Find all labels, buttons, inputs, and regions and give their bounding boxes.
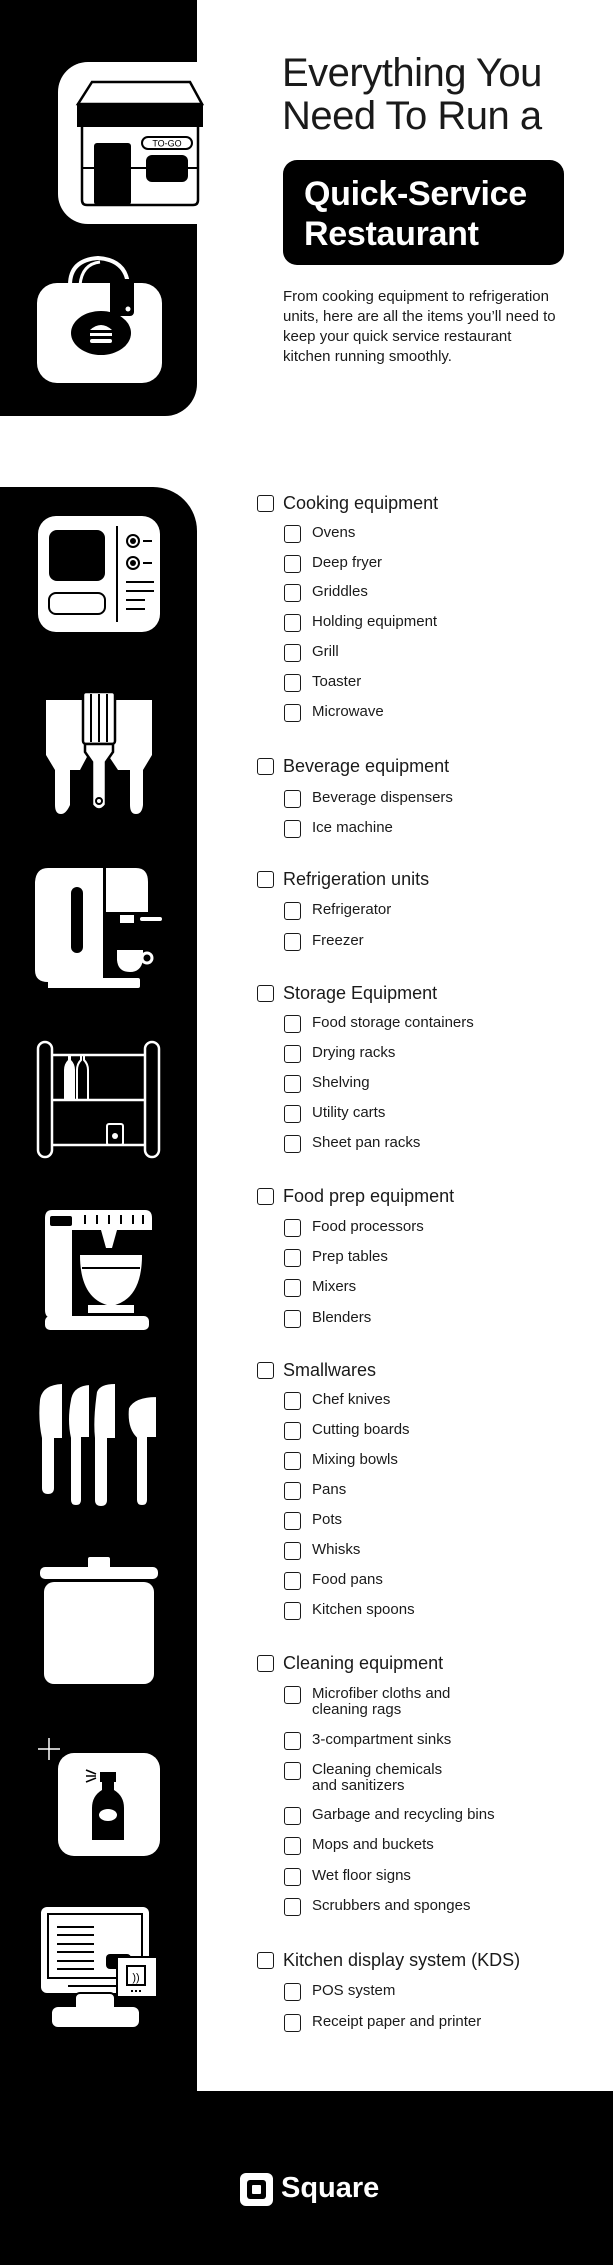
section: cleaning equipment: and sanitizers — [312, 1777, 405, 1794]
icon: knives — [39, 1384, 156, 1506]
title: Everything You — [282, 51, 542, 95]
icon: brushes — [46, 693, 152, 814]
title highlight box — [283, 160, 564, 265]
section: beverage equipment: Ice machine — [312, 819, 393, 836]
section: smallwares: Cutting boards — [312, 1421, 410, 1438]
section: storage equipment — [257, 983, 474, 1153]
section: beverage equipment: Beverage dispensers — [312, 789, 453, 806]
section: cleaning equipment: 3-compartment sinks — [312, 1731, 451, 1748]
section: smallwares: Kitchen spoons — [312, 1601, 415, 1618]
intro paragraph: kitchen running smoothly. — [283, 348, 452, 365]
icon: cooking range — [38, 516, 160, 632]
section: beverage equipment — [257, 756, 453, 838]
icon: store: TO-GO — [152, 138, 182, 148]
section: food prep equipment: Blenders — [312, 1309, 371, 1326]
section: cooking equipment: Microwave — [312, 703, 384, 720]
icon: computer with card reader — [41, 1907, 156, 2027]
section: cleaning equipment: Cleaning chemicals — [312, 1761, 442, 1778]
icon: store — [58, 62, 204, 224]
section: beverage equipment: Beverage equipment — [283, 756, 449, 776]
section: storage equipment: Storage Equipment — [283, 983, 437, 1003]
section: food prep equipment: Food processors — [312, 1218, 424, 1235]
section: kitchen display system — [257, 1950, 520, 2032]
section: cooking equipment: Holding equipment — [312, 613, 437, 630]
section: smallwares — [257, 1360, 415, 1620]
section: food prep equipment — [257, 1186, 454, 1328]
section: cleaning equipment — [257, 1653, 495, 1916]
section: cleaning equipment: Mops and buckets — [312, 1836, 434, 1853]
icon: pot — [40, 1557, 158, 1684]
section: storage equipment: Drying racks — [312, 1044, 395, 1061]
section: cooking equipment: Toaster — [312, 673, 361, 690]
title highlight box: Quick-Service — [304, 175, 527, 213]
section: cleaning equipment: cleaning rags — [312, 1701, 401, 1718]
title: Need To Run a — [282, 94, 542, 138]
section: cooking equipment: Grill — [312, 643, 339, 660]
section: refrigeration units: Freezer — [312, 932, 364, 949]
section: food prep equipment: Prep tables — [312, 1248, 388, 1265]
section: cooking equipment: Cooking equipment — [283, 493, 438, 513]
logo: Square: Square — [281, 2172, 379, 2204]
intro paragraph — [283, 288, 556, 365]
panel: main black sidebar and footer — [0, 487, 197, 2265]
section: storage equipment: Food storage containers — [312, 1014, 474, 1031]
section: cleaning equipment: Garbage and recycling bins — [312, 1806, 495, 1823]
section: smallwares: Pans — [312, 1481, 346, 1498]
section: kitchen display system: Kitchen display system (KDS) — [283, 1950, 520, 1970]
section: cleaning equipment: Microfiber cloths and — [312, 1685, 450, 1702]
section: food prep equipment: Food prep equipment — [283, 1186, 454, 1206]
section: cooking equipment: Deep fryer — [312, 554, 382, 571]
icon: spray bottle — [38, 1738, 160, 1856]
section: smallwares: Smallwares — [283, 1360, 376, 1380]
section: cooking equipment: Griddles — [312, 583, 368, 600]
section: cleaning equipment: Scrubbers and sponges — [312, 1897, 470, 1914]
title — [282, 51, 542, 138]
title highlight box: Restaurant — [304, 215, 479, 253]
section: smallwares: Pots — [312, 1511, 342, 1528]
intro paragraph: From cooking equipment to refrigeration — [283, 288, 549, 305]
section: refrigeration units: Refrigeration units — [283, 869, 429, 889]
section: cleaning equipment: Cleaning equipment — [283, 1653, 443, 1673]
section: smallwares: Food pans — [312, 1571, 383, 1588]
section: cooking equipment: Ovens — [312, 524, 355, 541]
icon: coffee machine — [35, 868, 162, 988]
footer — [0, 2091, 613, 2265]
section: storage equipment: Sheet pan racks — [312, 1134, 420, 1151]
section: refrigeration units — [257, 869, 429, 951]
icon: shelving — [36, 1040, 160, 1158]
intro paragraph: keep your quick service restaurant — [283, 328, 511, 345]
section: smallwares: Chef knives — [312, 1391, 390, 1408]
logo: Square — [240, 2172, 379, 2206]
section: smallwares: Whisks — [312, 1541, 360, 1558]
section: refrigeration units: Refrigerator — [312, 901, 391, 918]
section: smallwares: Mixing bowls — [312, 1451, 398, 1468]
icon: computer with card reader: )) — [132, 1972, 140, 1984]
section: kitchen display system: Receipt paper and printer — [312, 2013, 481, 2030]
icon: stand mixer — [45, 1210, 152, 1330]
panel: top black sidebar — [0, 0, 197, 416]
section: cleaning equipment: Wet floor signs — [312, 1867, 411, 1884]
section: cooking equipment — [257, 493, 438, 722]
section: kitchen display system: POS system — [312, 1982, 395, 1999]
section: storage equipment: Utility carts — [312, 1104, 385, 1121]
intro paragraph: units, here are all the items you’ll need to — [283, 308, 556, 325]
section: food prep equipment: Mixers — [312, 1278, 356, 1295]
icon: takeout bag — [37, 256, 162, 383]
section: storage equipment: Shelving — [312, 1074, 370, 1091]
